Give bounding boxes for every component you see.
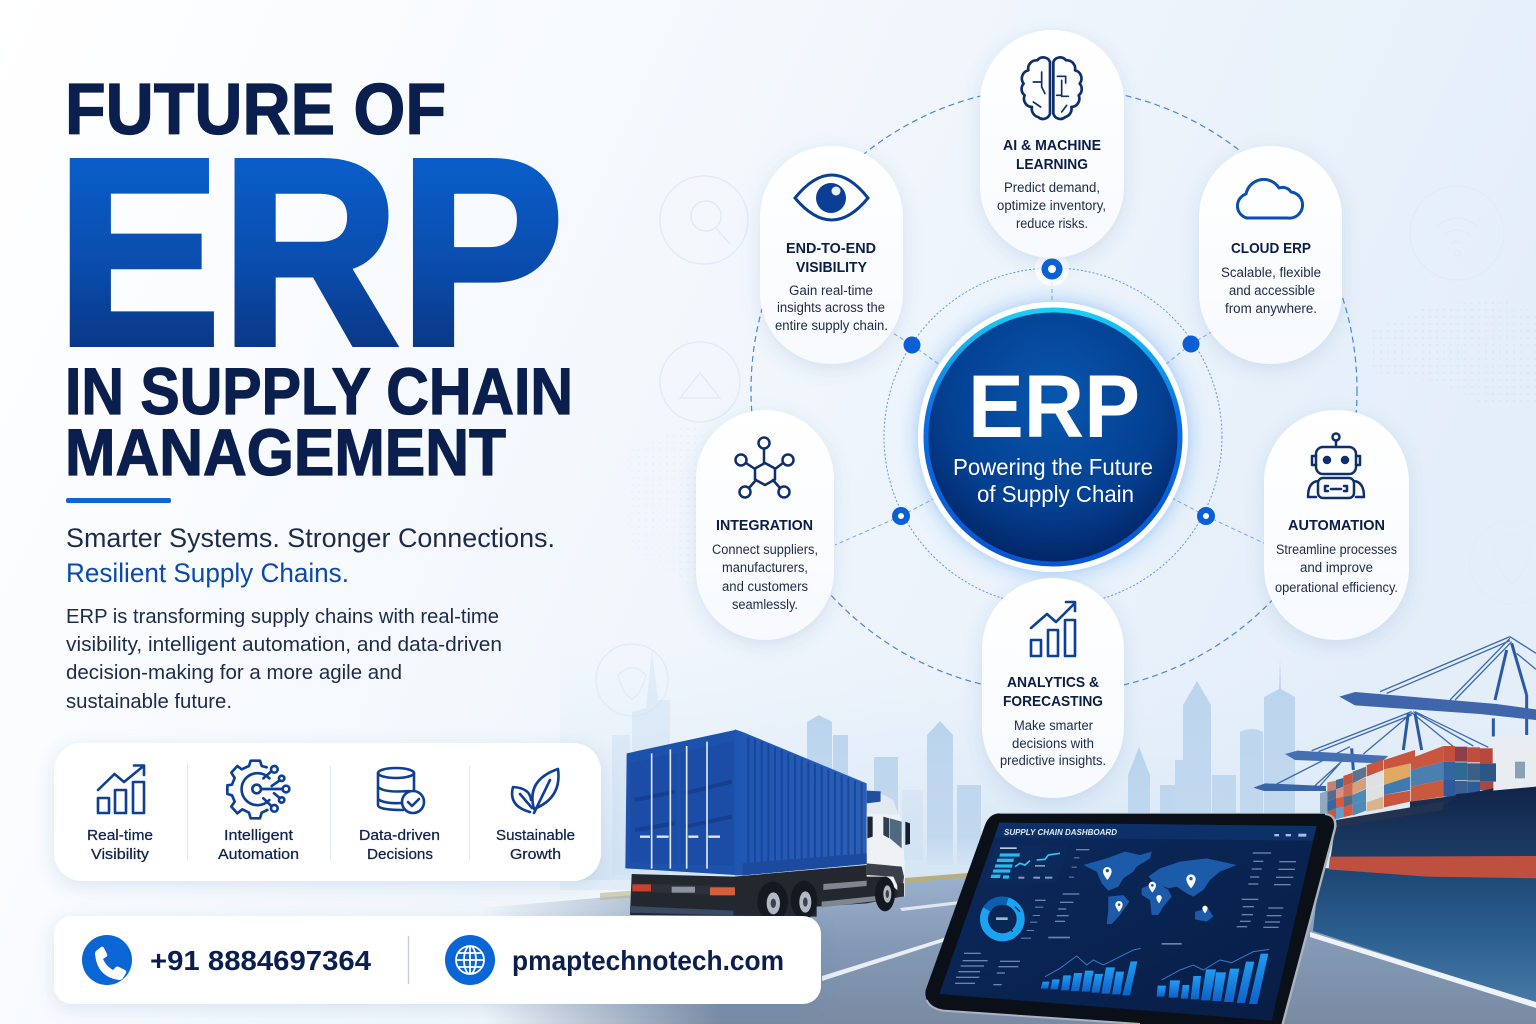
road [480,868,1536,1024]
cranes [1277,637,1536,786]
intro paragraph: ERP is transforming supply chains with real-time [66,605,499,628]
intro paragraph [66,605,502,713]
feature: data-driven decisions: Decisions [367,846,433,863]
description: and improve [1300,560,1373,575]
feature: real-time visibility: Visibility [91,846,150,863]
central ERP hub: Powering the Future [953,454,1153,480]
cargo ship and cranes [1253,637,1536,878]
description: optimize inventory, [997,198,1106,213]
container side [735,729,867,875]
card: cloud ERP [1199,146,1342,364]
description: and customers [722,579,808,594]
main title: FUTURE OF [65,70,446,150]
tablet dashboard [925,813,1335,1024]
cab [867,803,905,897]
heading: AI & MACHINE [1003,137,1101,154]
water [1310,868,1536,1008]
description [775,283,888,333]
card: automation [1264,410,1409,640]
dashboard header: SUPPLY CHAIN DASHBOARD [1004,828,1117,837]
feature: sustainable growth: Growth [510,846,561,863]
description [1275,542,1398,595]
heading: AUTOMATION [1288,517,1385,534]
icon: phone [82,935,132,985]
heading [1003,674,1103,710]
wheels [757,877,895,922]
heading: CLOUD ERP [1231,240,1311,257]
phone number: +91 8884697364 [150,945,371,976]
feature: data-driven decisions: Data-driven [359,827,440,844]
contact bar [54,916,821,1004]
main title [56,70,573,489]
containers [1320,746,1496,819]
accent rule [66,498,171,503]
world map [1083,852,1237,924]
deck fill behind containers [1410,788,1493,817]
description [1000,718,1106,768]
icon: globe [445,935,495,985]
hull [1331,787,1536,857]
feature: sustainable growth: Sustainable [496,827,575,844]
card: AI & machine learning [980,30,1124,258]
heading: VISIBILITY [796,259,867,276]
icon: eye [795,175,868,220]
description: seamlessly. [732,597,798,612]
heading: FORECASTING [1003,693,1103,710]
feature: intelligent automation: Automation [218,846,299,863]
central ERP hub [918,302,1188,572]
heading [1003,137,1101,173]
skyline [560,640,1536,890]
truck [625,729,910,922]
icon: brain [1022,57,1082,119]
in supply chain: IN SUPPLY CHAIN [65,354,573,428]
description [1221,265,1321,316]
feature: sustainable growth [496,769,575,863]
right bar chart [1157,949,1269,1004]
description: and accessible [1229,283,1315,298]
features panel [54,743,601,881]
card: analytics and forecasting [982,578,1124,798]
description [712,542,818,612]
panel: shipments metrics [983,845,1068,883]
description: entire supply chain. [775,318,888,333]
ERP wordmark: ERP [56,104,564,401]
heading: INTEGRATION [716,517,813,534]
heading: ANALYTICS & [1007,674,1099,691]
description: Streamline processes [1276,542,1397,557]
intro paragraph: decision-making for a more agile and [66,661,402,684]
description: reduce risks. [1016,216,1088,231]
connector nodes [892,252,1215,525]
card: end-to-end visibility [760,146,903,364]
management: MANAGEMENT [65,415,506,489]
donut chart [984,901,1021,937]
icon: network [736,438,794,498]
heading: LEARNING [1016,156,1088,173]
description: operational efficiency. [1275,580,1398,595]
description: insights across the [777,300,885,315]
central ERP hub: of Supply Chain [977,481,1134,507]
faint background decorations [596,176,1536,716]
heading [786,240,876,276]
intro paragraph: sustainable future. [66,690,232,713]
intro paragraph: visibility, intelligent automation, and data-driven [66,633,502,656]
description: decisions with [1012,736,1094,751]
feature: real-time visibility: Real-time [87,827,153,844]
left bar chart [1041,948,1141,995]
container rear [625,730,735,875]
tagline: Smarter Systems. Stronger Connections. [66,523,555,553]
website: pmaptechnotech.com [512,945,784,976]
card: integration [696,410,834,640]
description: Gain real-time [789,283,873,298]
description [997,180,1106,231]
feature: intelligent automation [218,761,299,863]
description: Predict demand, [1004,180,1100,195]
feature: intelligent automation: Intelligent [224,827,294,844]
feature: real-time visibility [87,766,153,863]
feature: data-driven decisions [359,768,440,863]
data tables [955,849,1296,985]
chassis [630,865,902,917]
central ERP hub: ERP [968,356,1140,456]
description: Scalable, flexible [1221,265,1321,280]
orbit lines [751,87,1357,693]
description: predictive insights. [1000,753,1106,768]
icon: robot [1308,434,1364,498]
icon: cloud [1237,179,1303,218]
tagline [66,523,555,588]
description: Make smarter [1014,718,1093,733]
description: Connect suppliers, [712,542,818,557]
description: from anywhere. [1225,301,1317,316]
superstructure [1490,735,1536,789]
icon: growth chart [1031,602,1075,656]
heading: END-TO-END [786,240,876,257]
dashboard header [995,823,1317,841]
description: manufacturers, [722,560,808,575]
tagline: Resilient Supply Chains. [66,558,349,588]
